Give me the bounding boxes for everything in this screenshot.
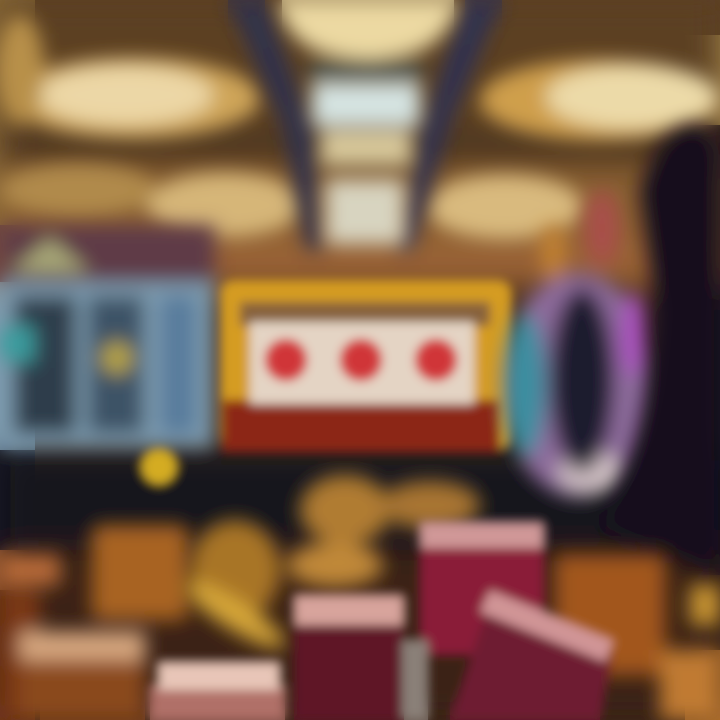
ceiling beams — [228, 0, 502, 250]
red cups — [150, 522, 615, 720]
machine body — [220, 280, 512, 452]
left slot machine — [0, 225, 215, 448]
yellow token — [140, 448, 178, 486]
red reel symbols — [266, 340, 456, 380]
central slot machine — [220, 280, 512, 452]
ceiling: lights — [0, 15, 720, 239]
golden centre pile — [178, 475, 480, 658]
roulette wheel — [502, 190, 654, 497]
central chandelier and skylights — [280, 0, 456, 244]
orange cups — [0, 525, 720, 720]
dark standing figure — [600, 125, 720, 575]
foreground cups — [0, 475, 720, 720]
